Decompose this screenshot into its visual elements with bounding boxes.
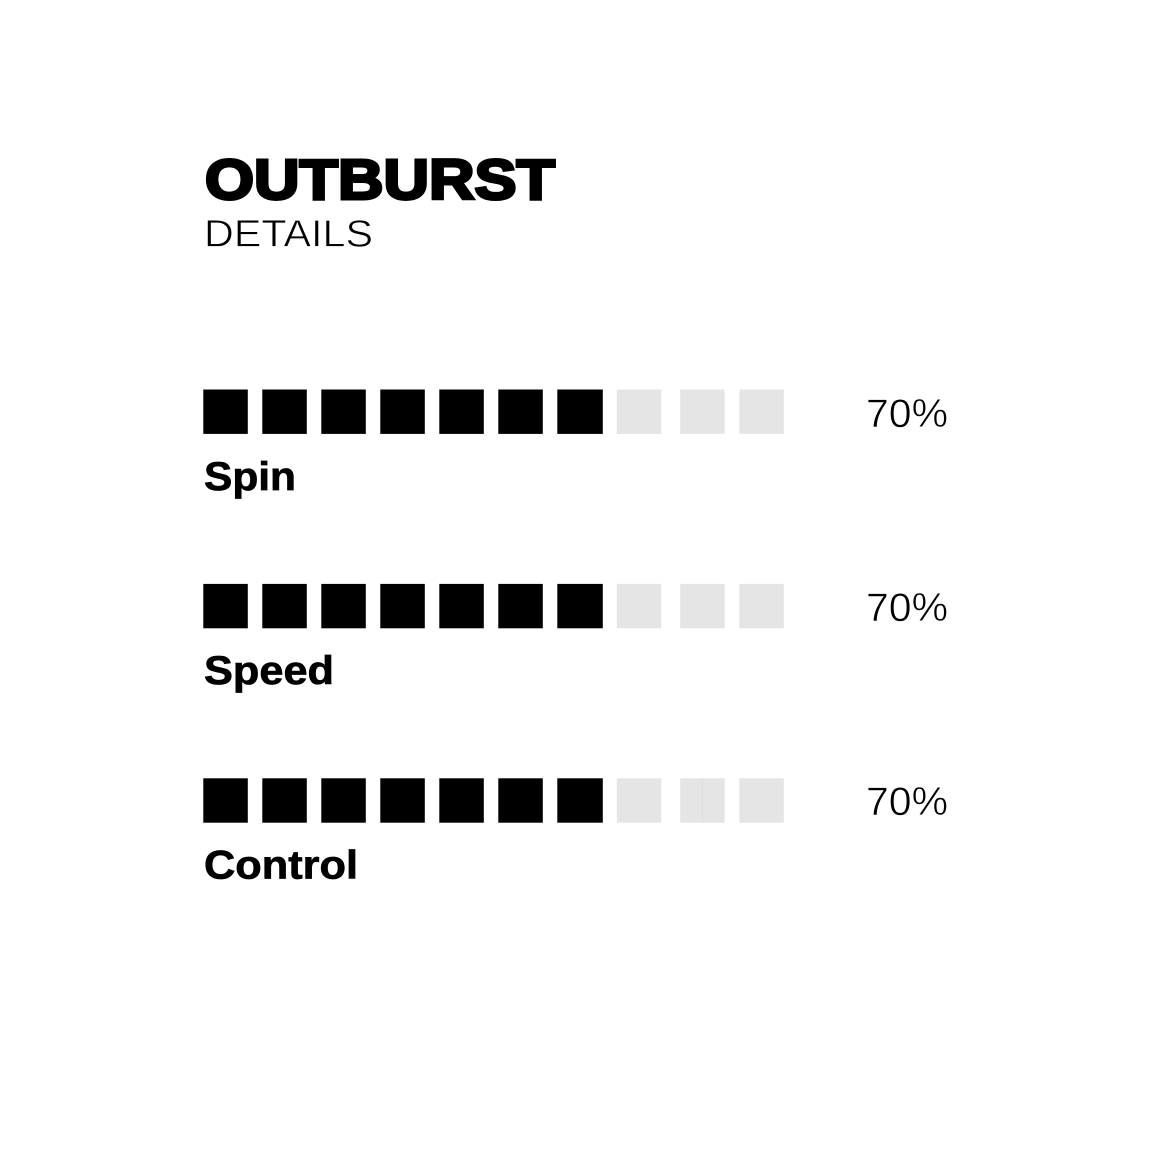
speed value: 70%	[866, 586, 948, 630]
panel: speed rating	[203, 584, 948, 693]
subtitle: DETAILS	[204, 214, 373, 256]
speed meter	[203, 584, 784, 628]
control value: 70%	[866, 780, 948, 824]
panel: control rating	[203, 778, 948, 888]
title: OUTBURST	[205, 148, 555, 212]
spin value: 70%	[866, 392, 948, 436]
spin label: Spin	[204, 455, 296, 499]
spin meter	[203, 390, 784, 434]
control meter	[203, 778, 784, 823]
panel: spin rating	[203, 390, 948, 499]
speed label: Speed	[204, 649, 334, 693]
control label: Control	[204, 844, 358, 888]
